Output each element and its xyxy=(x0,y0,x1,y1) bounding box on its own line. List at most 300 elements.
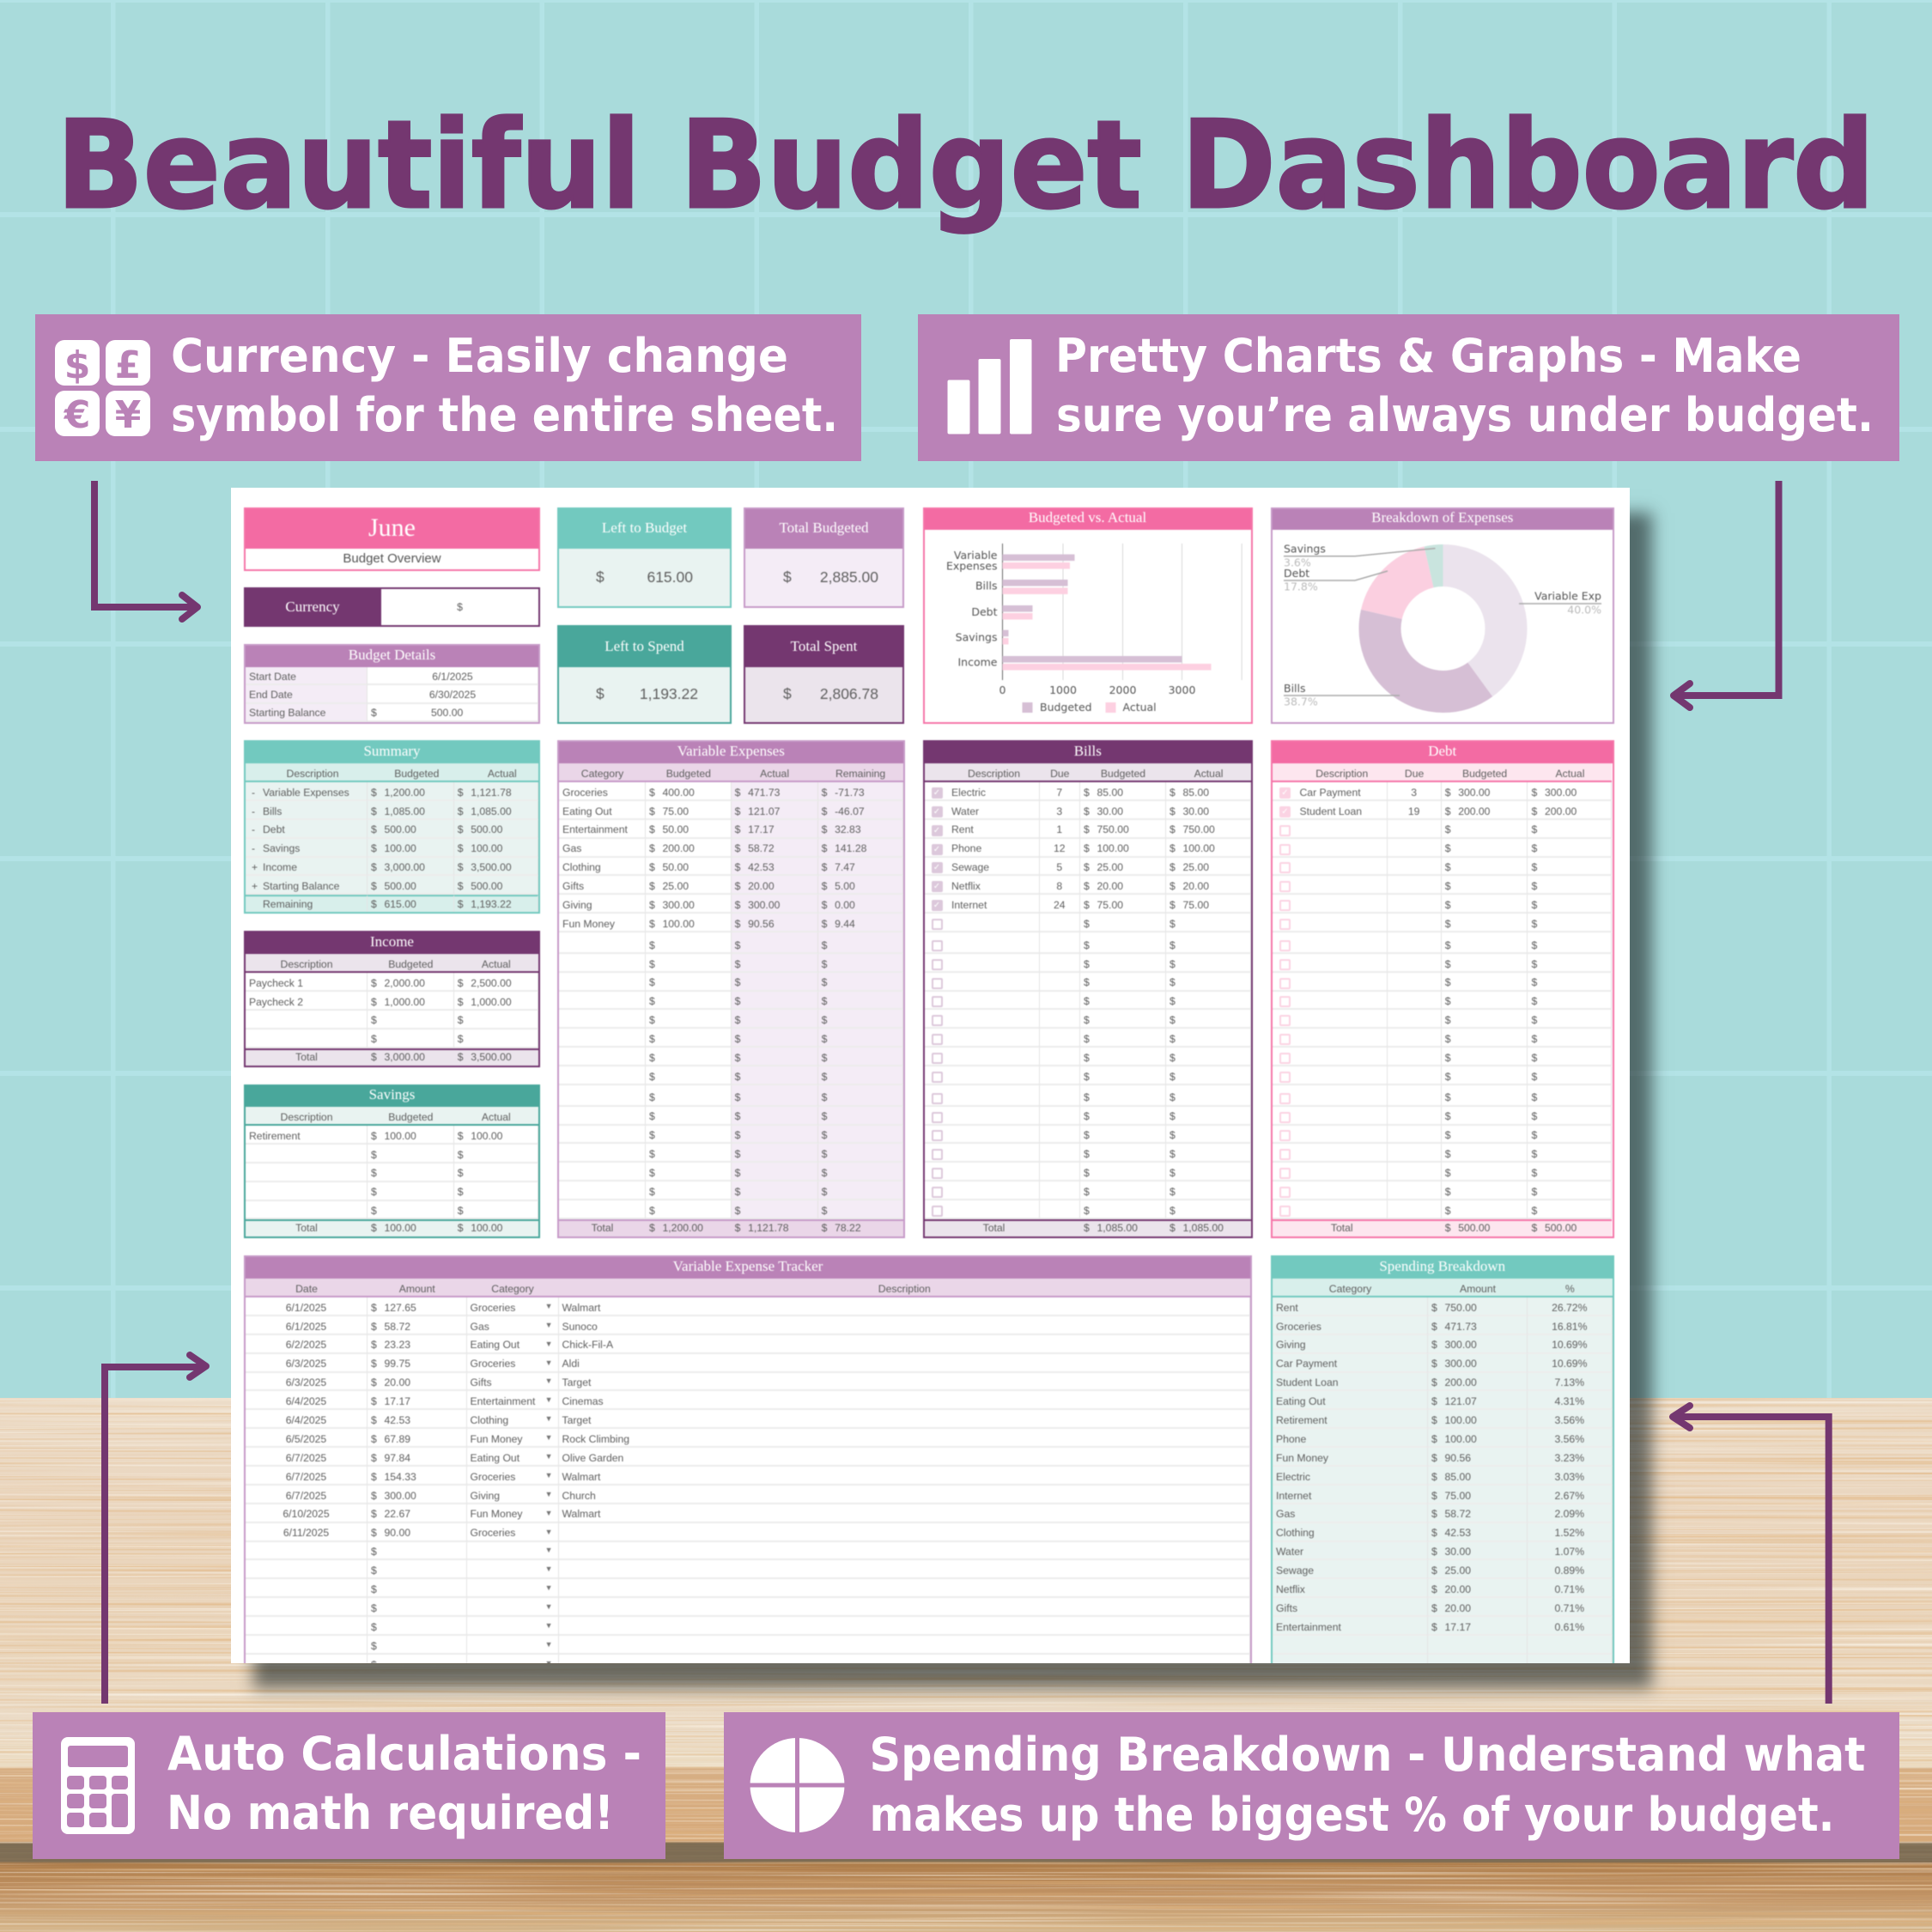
bills table: $ xyxy=(1170,805,1176,817)
bills table: Actual xyxy=(1194,768,1223,780)
tracker table: $ xyxy=(371,1414,377,1426)
bills table: ✓ xyxy=(933,826,940,835)
donut chart: Debt xyxy=(1284,567,1309,580)
tracker table: $ xyxy=(371,1471,377,1483)
tracker table: 42.53 xyxy=(385,1414,410,1426)
variable expenses table: Eating Out xyxy=(562,805,612,817)
details table: 6/30/2025 xyxy=(429,689,476,701)
debt table: $ xyxy=(1531,1052,1537,1064)
spending table: Amount xyxy=(1460,1283,1496,1295)
summary table: - xyxy=(252,787,255,799)
debt table: $ xyxy=(1445,958,1450,970)
variable expenses table: $ xyxy=(649,995,655,1007)
variable expenses table: $ xyxy=(735,823,740,835)
value: 1,193.22 xyxy=(640,685,698,702)
tracker table: $ xyxy=(371,1376,377,1388)
tracker table: 300.00 xyxy=(385,1490,416,1502)
tracker table: 6/2/2025 xyxy=(286,1339,326,1351)
bills table: 750.00 xyxy=(1097,823,1129,835)
panel: variable expenses xyxy=(557,740,905,1238)
debt table: $ xyxy=(1531,1110,1537,1122)
variable expenses table: $ xyxy=(649,1222,655,1234)
bills table: $ xyxy=(1084,1205,1090,1217)
spending table: $ xyxy=(1431,1452,1437,1464)
spending table: 3.03% xyxy=(1554,1471,1584,1483)
bills table: ✓ xyxy=(933,807,940,817)
banner text: auto calculations: Auto Calculations - xyxy=(167,1727,641,1781)
spending table: 4.31% xyxy=(1554,1395,1584,1407)
month heading: June xyxy=(368,513,416,542)
tracker table: ▼ xyxy=(545,1414,553,1423)
banner text: spending breakdown: Spending Breakdown - Understand what xyxy=(869,1728,1865,1782)
spending table: Student Loan xyxy=(1276,1376,1339,1388)
panel: budget details xyxy=(244,644,540,723)
spending table: 20.00 xyxy=(1444,1602,1471,1614)
bills table: $ xyxy=(1170,1186,1176,1198)
savings table: $ xyxy=(458,1130,463,1142)
tracker table: Groceries xyxy=(471,1527,515,1539)
details table: Start Date xyxy=(249,671,296,683)
tracker table: $ xyxy=(371,1508,377,1520)
tracker table: $ xyxy=(371,1339,377,1351)
variable expenses table: 20.00 xyxy=(748,880,775,892)
spending table xyxy=(1273,1279,1613,1674)
variable expenses table: -46.07 xyxy=(835,805,865,817)
income table: $ xyxy=(371,1014,377,1026)
summary table: 100.00 xyxy=(471,842,502,854)
variable expenses table: 400.00 xyxy=(663,787,695,799)
bills table: Electric xyxy=(951,787,986,799)
income table: $ xyxy=(458,1051,463,1063)
spending table: 471.73 xyxy=(1444,1321,1477,1333)
bills table: 100.00 xyxy=(1183,842,1215,854)
spending table: $ xyxy=(1431,1358,1437,1370)
debt table: $ xyxy=(1531,995,1537,1007)
banner text: charts: Pretty Charts & Graphs - Make xyxy=(1055,329,1801,383)
variable expenses table: 78.22 xyxy=(835,1222,861,1234)
tracker table: $ xyxy=(371,1527,377,1539)
bills table: $ xyxy=(1084,1167,1090,1179)
banner: spending breakdown xyxy=(724,1712,1899,1859)
summary table: Bills xyxy=(263,805,282,817)
donut chart: 38.7% xyxy=(1284,696,1318,708)
bills table: $ xyxy=(1084,958,1090,970)
tracker table: Walmart xyxy=(562,1471,600,1483)
tracker table: 6/4/2025 xyxy=(286,1395,326,1407)
variable expenses table: $ xyxy=(649,1148,655,1160)
variable expenses table: 17.17 xyxy=(748,823,775,835)
income table: Actual xyxy=(482,958,511,970)
income table: $ xyxy=(371,1033,377,1045)
bills table: 12 xyxy=(1054,842,1066,854)
spending table: Internet xyxy=(1276,1490,1311,1502)
spending table: Clothing xyxy=(1276,1527,1315,1539)
spending table: Gifts xyxy=(1276,1602,1297,1614)
debt table: $ xyxy=(1531,880,1537,892)
debt table: Description xyxy=(1315,768,1368,780)
variable expenses table: $ xyxy=(735,1222,740,1234)
summary table: $ xyxy=(371,898,377,910)
bar chart: Actual xyxy=(1122,701,1156,714)
icon: pie chart xyxy=(747,1735,847,1836)
spending table: $ xyxy=(1431,1414,1437,1426)
heading xyxy=(244,644,540,667)
heading: Income xyxy=(370,933,414,950)
panel: variable expense tracker xyxy=(244,1255,1252,1685)
tracker table: $ xyxy=(371,1546,377,1558)
variable expenses table: $ xyxy=(822,958,827,970)
variable expenses table: -71.73 xyxy=(835,787,865,799)
bar chart: 2000 xyxy=(1109,683,1136,696)
tracker table: $ xyxy=(371,1302,377,1314)
debt table: $ xyxy=(1531,939,1537,951)
spending table: Gas xyxy=(1276,1508,1295,1520)
tracker table: 99.75 xyxy=(385,1358,410,1370)
savings table: Description xyxy=(281,1111,332,1123)
variable expenses table: $ xyxy=(649,823,655,835)
debt table: $ xyxy=(1445,939,1450,951)
tracker table: Groceries xyxy=(471,1471,515,1483)
income table: Budgeted xyxy=(388,958,433,970)
spending table: $ xyxy=(1431,1339,1437,1351)
bills table: ✓ xyxy=(933,901,940,910)
variable expenses table: $ xyxy=(822,918,827,930)
debt table: ✓ xyxy=(1281,788,1289,798)
heading xyxy=(1271,1255,1614,1279)
tracker table: $ xyxy=(371,1395,377,1407)
bills table: $ xyxy=(1170,842,1176,854)
tracker table: ▼ xyxy=(545,1528,553,1536)
savings table: 100.00 xyxy=(385,1130,416,1142)
tracker table: ▼ xyxy=(545,1321,553,1329)
heading: Spending Breakdown xyxy=(1379,1258,1505,1274)
bills table: $ xyxy=(1170,1033,1176,1045)
summary table: Budgeted xyxy=(394,768,439,780)
variable expenses table: Remaining xyxy=(835,768,885,780)
spending table: 85.00 xyxy=(1444,1471,1471,1483)
variable expenses table: $ xyxy=(735,1091,740,1103)
variable expenses table: $ xyxy=(735,976,740,988)
bills table: $ xyxy=(1170,1205,1176,1217)
summary table: $ xyxy=(371,880,377,892)
spending table: $ xyxy=(1431,1546,1437,1558)
summary table: 3,000.00 xyxy=(385,861,425,873)
savings table: 100.00 xyxy=(385,1222,416,1234)
debt table: $ xyxy=(1445,787,1450,799)
tracker table: Category xyxy=(491,1283,534,1295)
spending table: 2.09% xyxy=(1554,1508,1584,1520)
debt table: $ xyxy=(1531,1186,1537,1198)
tracker table: ▼ xyxy=(545,1546,553,1554)
bills table: $ xyxy=(1084,1186,1090,1198)
tracker table: ▼ xyxy=(545,1602,553,1611)
donut chart: 3.6% xyxy=(1284,556,1311,568)
spending table: 20.00 xyxy=(1444,1583,1471,1595)
bills table: $ xyxy=(1170,861,1176,873)
heading xyxy=(1271,740,1614,763)
value: $ xyxy=(783,568,792,586)
tracker table: $ xyxy=(371,1452,377,1464)
bills table: Phone xyxy=(951,842,981,854)
spending table: Fun Money xyxy=(1276,1452,1328,1464)
spending table: $ xyxy=(1431,1321,1437,1333)
bills table: 7 xyxy=(1056,787,1062,799)
tracker table: Walmart xyxy=(562,1508,600,1520)
bills table: $ xyxy=(1170,1148,1176,1160)
details table: $ xyxy=(371,707,377,719)
summary table: $ xyxy=(458,898,463,910)
debt table: $ xyxy=(1531,918,1537,930)
banner: auto calculations xyxy=(33,1712,665,1859)
bar chart: Savings xyxy=(955,630,997,644)
variable expenses table: $ xyxy=(649,1129,655,1141)
debt table: Due xyxy=(1405,768,1424,780)
debt table: $ xyxy=(1531,1033,1537,1045)
summary table: 1,121.78 xyxy=(471,787,512,799)
variable expenses table: $ xyxy=(822,1148,827,1160)
heading: Debt xyxy=(1428,743,1456,759)
variable expenses table: 7.47 xyxy=(835,861,855,873)
bills table: Total xyxy=(983,1222,1005,1234)
heading: Budgeted vs. Actual xyxy=(1029,509,1146,526)
variable expenses table: $ xyxy=(735,1110,740,1122)
variable expenses table: $ xyxy=(649,1186,655,1198)
savings table: $ xyxy=(458,1167,463,1179)
spending table: 25.00 xyxy=(1444,1564,1471,1577)
tracker table: Fun Money xyxy=(471,1433,522,1445)
debt table: $ xyxy=(1445,861,1450,873)
bills table: $ xyxy=(1170,918,1176,930)
variable expenses table: 100.00 xyxy=(663,918,695,930)
variable expenses table: $ xyxy=(735,1071,740,1083)
tracker table: Target xyxy=(562,1376,591,1388)
income table: 1,000.00 xyxy=(385,996,425,1008)
variable expenses table: $ xyxy=(649,861,655,873)
variable expenses table: $ xyxy=(735,1014,740,1026)
banner: currency xyxy=(35,314,861,461)
spending table: 58.72 xyxy=(1444,1508,1471,1520)
debt table: 500.00 xyxy=(1458,1222,1490,1234)
debt table: $ xyxy=(1445,995,1450,1007)
variable expenses table: $ xyxy=(735,1052,740,1064)
value: $ xyxy=(596,568,605,586)
savings table: Retirement xyxy=(249,1130,301,1142)
variable expenses table: 1,200.00 xyxy=(663,1222,703,1234)
spending table: 300.00 xyxy=(1444,1339,1477,1351)
debt table: $ xyxy=(1445,1014,1450,1026)
spending table: Rent xyxy=(1276,1302,1298,1314)
bills table: $ xyxy=(1084,787,1090,799)
debt table: $ xyxy=(1445,1205,1450,1217)
tracker table: 90.00 xyxy=(385,1527,410,1539)
variable expenses table: 50.00 xyxy=(663,823,689,835)
panel: total spent xyxy=(744,625,904,723)
variable expenses table: $ xyxy=(822,1205,827,1217)
spending table: $ xyxy=(1431,1302,1437,1314)
donut chart: Variable Exp xyxy=(1534,589,1601,603)
bills table: Rent xyxy=(951,823,974,835)
bills table: 85.00 xyxy=(1183,787,1209,799)
tracker table: Date xyxy=(295,1283,318,1295)
variable expenses table: $ xyxy=(822,805,827,817)
spending table: 3.56% xyxy=(1554,1433,1584,1445)
icon: calculator xyxy=(61,1737,135,1834)
panel: June overview xyxy=(244,507,540,570)
bills table: ✓ xyxy=(933,882,940,891)
variable expenses table: $ xyxy=(649,958,655,970)
variable expenses table: Entertainment xyxy=(562,823,628,835)
bills table: ✓ xyxy=(933,845,940,854)
savings table: $ xyxy=(371,1205,377,1217)
summary table: $ xyxy=(371,787,377,799)
summary table: $ xyxy=(458,861,463,873)
debt table: $ xyxy=(1531,787,1537,799)
bar chart: Income xyxy=(957,656,997,668)
icon: currency symbols xyxy=(55,340,150,437)
savings table: $ xyxy=(458,1149,463,1161)
debt table: 19 xyxy=(1408,805,1419,817)
variable expenses table: $ xyxy=(735,842,740,854)
spending table: 0.89% xyxy=(1554,1564,1584,1577)
spending table: $ xyxy=(1431,1602,1437,1614)
bills table: $ xyxy=(1170,1091,1176,1103)
tracker table: $ xyxy=(371,1490,377,1502)
spending table: 30.00 xyxy=(1444,1546,1471,1558)
bills table: 75.00 xyxy=(1097,899,1123,911)
heading: Breakdown of Expenses xyxy=(1371,509,1513,526)
details table: End Date xyxy=(249,689,293,701)
bills table: $ xyxy=(1170,939,1176,951)
variable expenses table: 300.00 xyxy=(663,899,695,911)
variable expenses table: $ xyxy=(822,880,827,892)
summary table: + xyxy=(252,861,258,873)
bills table: $ xyxy=(1084,842,1090,854)
heading: Variable Expenses xyxy=(677,743,785,759)
summary table: Savings xyxy=(263,842,300,854)
tracker table: ▼ xyxy=(545,1376,553,1385)
variable expenses table: 471.73 xyxy=(748,787,780,799)
tracker table: 6/3/2025 xyxy=(286,1376,326,1388)
tracker table: ▼ xyxy=(545,1490,553,1498)
income table: $ xyxy=(458,977,463,989)
debt table: $ xyxy=(1445,842,1450,854)
variable expenses table: $ xyxy=(822,823,827,835)
banner text: charts xyxy=(1055,329,1874,442)
banner text: currency: Currency - Easily change xyxy=(171,329,788,383)
variable expenses table: $ xyxy=(822,1186,827,1198)
spending table: 1.07% xyxy=(1554,1546,1584,1558)
tracker table: $ xyxy=(371,1602,377,1614)
subtitle: Budget Overview xyxy=(343,551,441,566)
heading xyxy=(244,1255,1252,1279)
spending table: 0.61% xyxy=(1554,1621,1584,1633)
bills table: Description xyxy=(968,768,1020,780)
income table: $ xyxy=(458,1014,463,1026)
summary table: 500.00 xyxy=(471,880,502,892)
bills table: $ xyxy=(1084,1110,1090,1122)
income table: $ xyxy=(371,996,377,1008)
summary table: - xyxy=(252,805,255,817)
variable expenses table: 141.28 xyxy=(835,842,866,854)
tracker table: Sunoco xyxy=(562,1321,598,1333)
debt table: $ xyxy=(1445,1033,1450,1045)
value: $ xyxy=(596,685,605,702)
bills table: 25.00 xyxy=(1183,861,1209,873)
summary table: 1,085.00 xyxy=(385,805,425,817)
bills table: $ xyxy=(1170,787,1176,799)
panel: savings xyxy=(244,1084,540,1238)
bills table: 100.00 xyxy=(1097,842,1129,854)
spending table: Water xyxy=(1276,1546,1303,1558)
spending table: 42.53 xyxy=(1444,1527,1471,1539)
variable expenses table: Clothing xyxy=(562,861,601,873)
bills table: $ xyxy=(1170,823,1176,835)
bills table: $ xyxy=(1084,1071,1090,1083)
tracker table: Amount xyxy=(399,1283,435,1295)
bills table: ✓ xyxy=(933,863,940,872)
summary table: - xyxy=(252,842,255,854)
tracker table: ▼ xyxy=(545,1640,553,1649)
panel: debt xyxy=(1271,740,1614,1238)
variable expenses table: $ xyxy=(649,1014,655,1026)
tracker table: Clothing xyxy=(471,1414,508,1426)
spending table: 200.00 xyxy=(1444,1376,1477,1388)
variable expenses table: $ xyxy=(735,805,740,817)
spending table: Eating Out xyxy=(1276,1395,1326,1407)
spending table: 26.72% xyxy=(1552,1302,1587,1314)
tracker table: 6/3/2025 xyxy=(286,1358,326,1370)
tracker table: 154.33 xyxy=(385,1471,416,1483)
tracker table: $ xyxy=(371,1433,377,1445)
variable expenses table: 1,121.78 xyxy=(748,1222,789,1234)
value: 615.00 xyxy=(647,568,693,586)
income table: 3,000.00 xyxy=(385,1051,425,1063)
bills table: $ xyxy=(1084,939,1090,951)
debt table: $ xyxy=(1531,899,1537,911)
income table: Total xyxy=(295,1051,318,1063)
savings table: $ xyxy=(371,1167,377,1179)
bills table: $ xyxy=(1170,1110,1176,1122)
icon: currency symbols: $ xyxy=(64,343,90,387)
variable expenses table: Actual xyxy=(760,768,789,780)
spending table: $ xyxy=(1431,1564,1437,1577)
variable expenses table xyxy=(559,763,903,1236)
spending table: 17.17 xyxy=(1444,1621,1471,1633)
value xyxy=(559,667,730,722)
bills table: 30.00 xyxy=(1097,805,1123,817)
bills table: $ xyxy=(1170,976,1176,988)
debt table: $ xyxy=(1445,899,1450,911)
tracker table xyxy=(246,1278,1250,1663)
income table: $ xyxy=(458,996,463,1008)
donut chart: Savings xyxy=(1284,543,1326,555)
variable expenses table: $ xyxy=(822,1052,827,1064)
spending table: 100.00 xyxy=(1444,1414,1477,1426)
heading xyxy=(922,507,1252,530)
variable expenses table: $ xyxy=(735,1205,740,1217)
spending table: Groceries xyxy=(1276,1321,1321,1333)
panel: total budgeted xyxy=(744,507,904,608)
currency label xyxy=(244,587,381,627)
tracker table: 20.00 xyxy=(385,1376,410,1388)
arrow: auto calculations to tracker xyxy=(101,1352,210,1704)
panel: summary xyxy=(244,740,540,914)
income table: 1,000.00 xyxy=(471,996,512,1008)
variable expenses table: $ xyxy=(822,1014,827,1026)
tracker table: Eating Out xyxy=(471,1339,519,1351)
tracker table: Fun Money xyxy=(471,1508,522,1520)
banner text: auto calculations: No math required! xyxy=(167,1786,614,1840)
